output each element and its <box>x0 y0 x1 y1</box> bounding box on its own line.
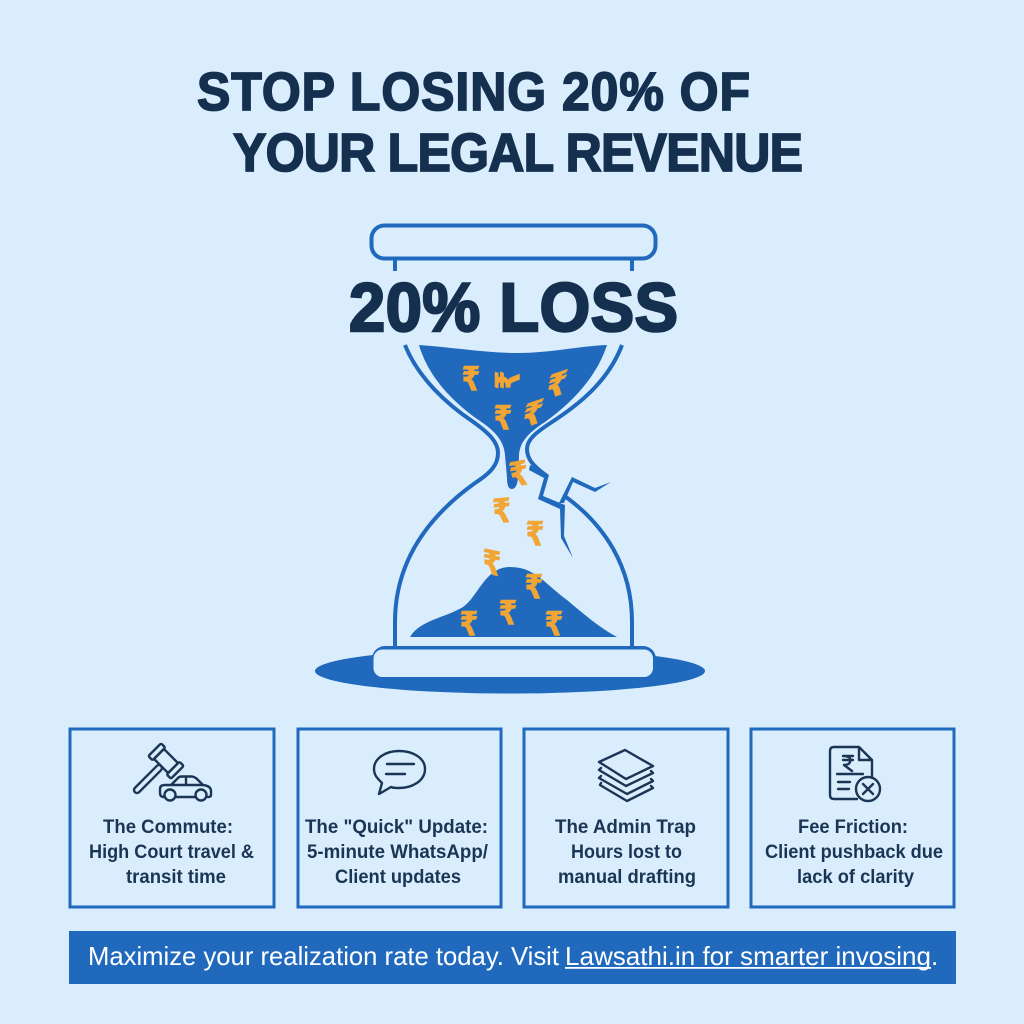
hourglass top cap <box>372 226 656 271</box>
title: YOUR LEGAL REVENUE <box>233 123 803 183</box>
falling rupee coins <box>460 361 570 644</box>
crack in glass <box>529 465 611 558</box>
call to action banner <box>69 931 956 984</box>
falling rupee coins: ₹ <box>507 455 532 496</box>
lower sand pile <box>410 567 617 637</box>
title: STOP LOSING 20% OF <box>197 62 750 122</box>
fee friction text: lack of clarity <box>797 867 914 888</box>
icon: invoice with cross <box>830 747 880 801</box>
falling rupee coins: ₹ <box>526 516 544 554</box>
glass outline <box>395 345 632 647</box>
base shadow ellipse <box>315 648 705 694</box>
icon: chat bubble <box>374 751 425 794</box>
admin trap text: manual drafting <box>558 867 696 888</box>
panel: quick update <box>298 729 501 907</box>
commute text: High Court travel & <box>89 842 254 863</box>
icon: gavel and car <box>124 743 211 803</box>
title <box>197 62 803 183</box>
fee friction text: Fee Friction: <box>798 817 908 838</box>
admin trap text: Hours lost to <box>571 842 682 863</box>
quick update text: 5-minute WhatsApp/ <box>307 842 489 863</box>
falling rupee coins: ₹ <box>490 371 528 389</box>
hourglass illustration <box>315 226 705 694</box>
falling rupee coins: ₹ <box>491 492 513 532</box>
commute text: The Commute: <box>103 817 233 838</box>
admin trap text: The Admin Trap <box>555 817 696 838</box>
commute text: transit time <box>126 867 226 888</box>
falling rupee coins: ₹ <box>483 542 501 585</box>
fee friction text: Client pushback due <box>765 842 943 863</box>
commute text <box>89 817 254 888</box>
falling rupee coins: ₹ <box>462 361 480 399</box>
quick update text: The "Quick" Update: <box>305 817 488 838</box>
falling rupee coins: ₹ <box>499 595 517 633</box>
admin trap text <box>555 817 696 888</box>
falling rupee coins: ₹ <box>545 606 563 644</box>
banner text: Lawsathi.in for smarter invosing <box>565 941 931 971</box>
panel: fee friction <box>751 729 954 907</box>
fee friction text <box>765 817 943 888</box>
falling rupee coins: ₹ <box>494 400 512 438</box>
falling rupee coins: ₹ <box>543 362 570 408</box>
falling rupee coins: ₹ <box>525 569 543 607</box>
quick update text: Client updates <box>335 867 461 888</box>
upper sand <box>419 345 607 489</box>
panel: the commute <box>70 729 274 907</box>
banner text: . <box>931 941 938 971</box>
20% loss label: 20% LOSS <box>349 269 678 346</box>
base outline <box>372 646 656 682</box>
banner text <box>88 941 938 971</box>
panel: admin trap <box>524 729 728 907</box>
quick update text <box>305 817 489 888</box>
falling rupee coins: ₹ <box>460 606 478 644</box>
banner text: Maximize your realization rate today. Visit <box>88 941 560 971</box>
falling rupee coins: ₹ <box>519 391 546 437</box>
base plate <box>374 650 653 677</box>
icon: stacked papers <box>599 750 653 801</box>
